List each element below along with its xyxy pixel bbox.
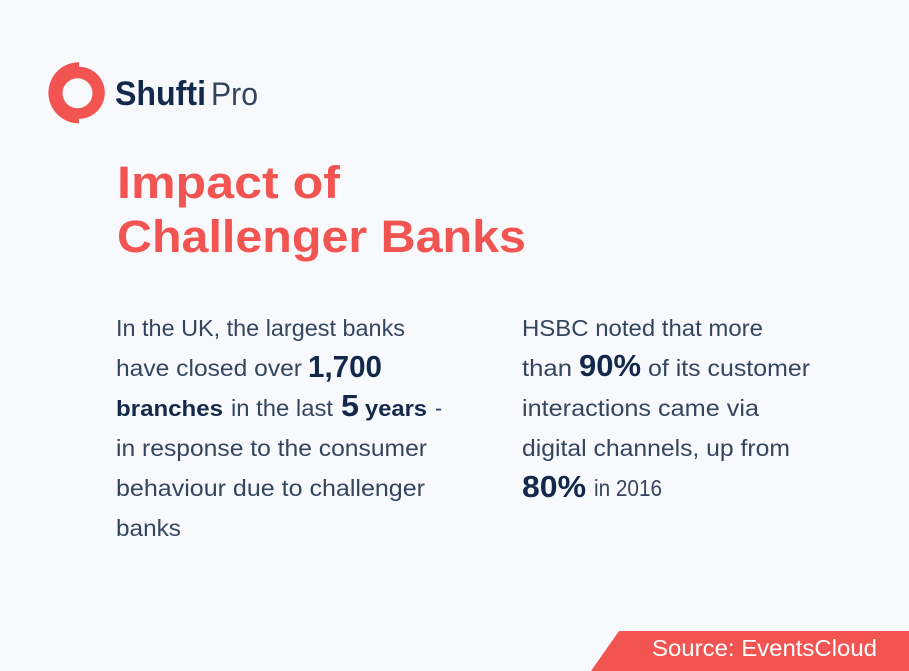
text block: UK branch closures: 5: [341, 389, 359, 423]
text block: UK branch closures: have closed over: [116, 355, 302, 381]
text block: UK branch closures: In the UK, the largest banks: [116, 315, 405, 341]
text block: UK branch closures: behaviour due to challenger: [116, 475, 425, 501]
text block: HSBC digital interactions: 90%: [579, 349, 641, 383]
text block: UK branch closures: 1,700: [308, 350, 382, 384]
source banner: [591, 631, 909, 671]
text block: HSBC digital interactions: 80%: [522, 470, 586, 504]
title: Challenger Banks: [117, 211, 526, 262]
text block: HSBC digital interactions: in 2016: [594, 475, 662, 501]
text block: UK branch closures: in the last: [231, 395, 333, 421]
text block: UK branch closures: years: [365, 396, 427, 421]
text block: UK branch closures: in response to the consumer: [116, 435, 427, 461]
logo wordmark: Shufti: [115, 75, 206, 113]
text block: HSBC digital interactions: [522, 315, 810, 504]
source banner: Source: EventsCloud: [652, 635, 877, 661]
icon: logo ring: [48, 62, 105, 123]
text block: HSBC digital interactions: of its customer: [648, 355, 810, 381]
title: Impact of: [117, 157, 341, 208]
logo wordmark: Pro: [211, 76, 258, 112]
title: [117, 157, 526, 262]
logo: Shufti Pro: [48, 62, 258, 123]
text block: HSBC digital interactions: interactions came via: [522, 395, 760, 421]
text block: HSBC digital interactions: than: [522, 355, 572, 381]
text block: UK branch closures: -: [435, 395, 442, 421]
text block: UK branch closures: [116, 315, 442, 541]
text block: UK branch closures: banks: [116, 515, 181, 541]
logo wordmark: [115, 75, 258, 113]
text block: HSBC digital interactions: HSBC noted that more: [522, 315, 763, 341]
text block: HSBC digital interactions: digital channels, up from: [522, 435, 790, 461]
text block: UK branch closures: branches: [116, 396, 223, 421]
